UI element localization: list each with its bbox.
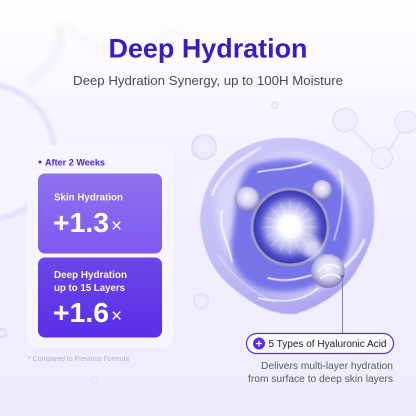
callout description: Delivers multi-layer hydration — [261, 360, 393, 372]
illustration: hyaluronic acid droplet — [200, 138, 374, 314]
decorative large bubbles at left — [0, 25, 180, 337]
callout pill: 5 types of hyaluronic acid — [246, 334, 394, 354]
icon: plus — [253, 338, 265, 350]
small sphere right — [312, 180, 332, 200]
stat card: skin hydration: Skin Hydration — [54, 192, 123, 204]
callout description: from surface to deep skin layers — [248, 373, 393, 385]
stat card: deep hydration: +1.6 — [53, 297, 109, 328]
large sphere — [311, 254, 345, 288]
footnote: * Compared to Previous Formula — [28, 356, 129, 363]
stat card: deep hydration — [38, 258, 162, 338]
small sphere left — [234, 186, 260, 212]
stat card: skin hydration: +1.3 — [53, 207, 109, 238]
stat card: deep hydration: Deep Hydration — [54, 269, 127, 281]
callout description — [248, 360, 393, 385]
title: Deep Hydration — [108, 34, 308, 64]
label: after 2 weeks: After 2 Weeks — [45, 158, 105, 168]
leader line — [341, 275, 344, 334]
central lens — [250, 188, 330, 266]
stat card: deep hydration: × — [111, 306, 122, 327]
panel: results after 2 weeks — [28, 146, 172, 347]
decorative floating bubbles — [90, 101, 279, 384]
subtitle: Deep Hydration Synergy, up to 100H Moisture — [73, 73, 343, 88]
stat card: skin hydration: × — [111, 216, 122, 237]
callout pill: 5 types of hyaluronic acid: 5 Types of Hyaluronic Acid — [268, 339, 386, 350]
stat card: deep hydration: up to 15 Layers — [54, 282, 125, 294]
decorative molecule at top right — [333, 108, 416, 168]
stat card: skin hydration — [38, 174, 162, 254]
